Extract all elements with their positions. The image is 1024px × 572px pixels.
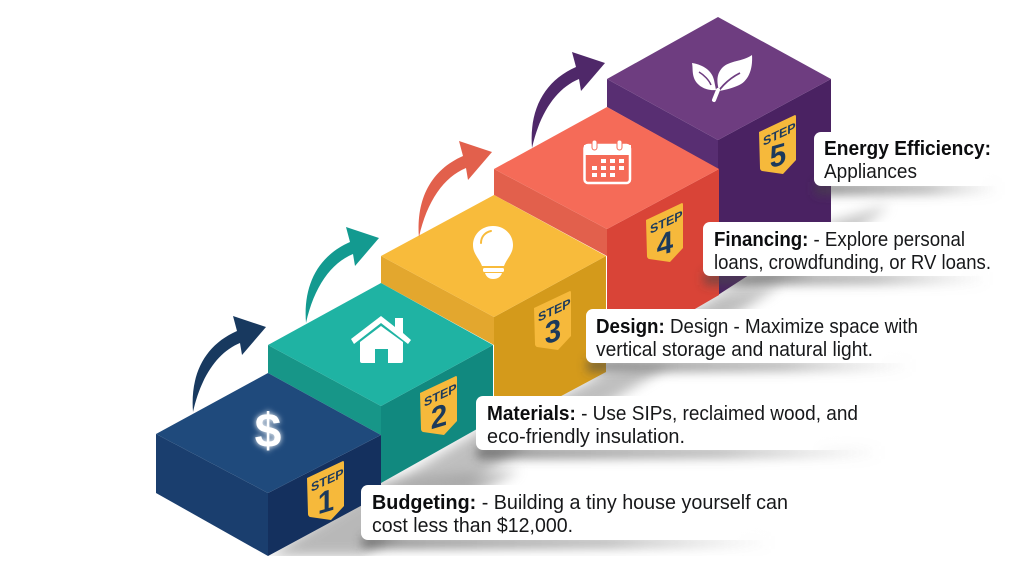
callout: materials: Materials: - Use SIPs, reclaimed wood, and: [487, 402, 858, 425]
stair ground shadow: [268, 205, 890, 556]
callout: energy efficiency: Appliances: [824, 160, 917, 183]
badge: step 5: [759, 115, 796, 175]
badge: step 1: STEP: [311, 465, 344, 495]
badge: step 2: 2: [431, 396, 447, 436]
icon: house: [351, 316, 411, 363]
infographic: five-step isometric staircase: [156, 17, 990, 556]
badge: step 2: STEP: [424, 380, 457, 410]
icon: calendar: [584, 140, 631, 183]
badge: step 1: 1: [318, 481, 334, 521]
badge: step 3: [534, 291, 571, 351]
callout: design: [586, 309, 931, 372]
badge: step 3: 3: [545, 311, 561, 351]
badge: step 3: STEP: [538, 295, 571, 325]
callout: budgeting: Budgeting: - Building a tiny house yourself can: [372, 491, 788, 514]
block: step 1: [156, 373, 381, 556]
icon: light bulb: [473, 226, 513, 279]
badge: step 4: [646, 203, 683, 263]
icon: dollar sign: $: [255, 405, 282, 458]
arrow: step 2 to 3: [306, 227, 379, 323]
callout: design: vertical storage and natural light.: [596, 338, 873, 361]
arrow: step 3 to 4: [419, 141, 492, 237]
arrow: step 4 to 5: [532, 52, 605, 148]
callout: energy efficiency: Energy Efficiency:: [824, 137, 991, 160]
callout: materials: eco-friendly insulation.: [487, 425, 685, 448]
arrow: step 1 to 2: [193, 316, 266, 412]
callout: budgeting: [361, 485, 801, 549]
callout: materials: [476, 396, 882, 459]
badge: step 4: STEP: [650, 207, 683, 237]
badge: step 2: [420, 376, 457, 436]
badge: step 4: 4: [657, 223, 673, 263]
callout: budgeting: cost less than $12,000.: [372, 514, 573, 537]
badge: step 5: 5: [770, 135, 786, 175]
badge: step 5: STEP: [763, 119, 796, 149]
callout: financing: [703, 222, 1005, 285]
block: step 5: [607, 17, 831, 295]
icon: leaf: [692, 55, 752, 100]
block: step 3: [381, 195, 606, 432]
callout: design: Design: Design - Maximize space with: [596, 315, 918, 338]
callout: energy efficiency: [814, 132, 1010, 195]
callout: financing: Financing: - Explore personal: [714, 228, 965, 251]
block: step 2: [268, 283, 493, 483]
callout: financing: loans, crowdfunding, or RV loans.: [714, 251, 991, 274]
badge: step 1: [307, 461, 344, 521]
block: step 4: [494, 107, 719, 360]
